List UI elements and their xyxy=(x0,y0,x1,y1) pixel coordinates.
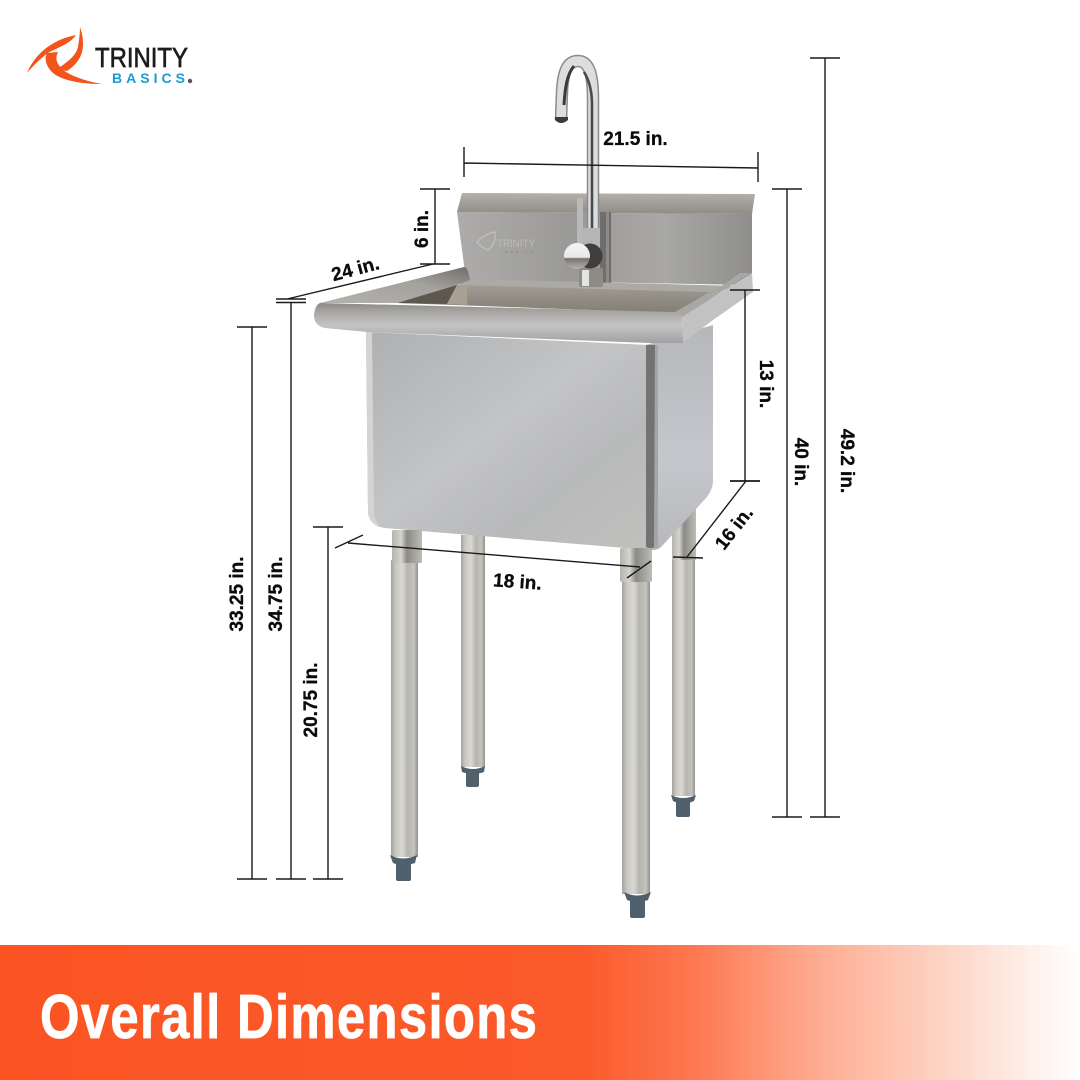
logo: Trinity Basics xyxy=(27,27,192,86)
dimension lines xyxy=(227,58,857,879)
dimension: 24 in.: 24 in. xyxy=(329,253,382,286)
basin xyxy=(397,285,710,313)
back legs xyxy=(461,505,696,817)
sink illustration xyxy=(314,61,755,918)
dimension: 18 in. xyxy=(335,535,651,595)
backsplash embossed logo: TRINITY xyxy=(497,238,536,250)
front legs xyxy=(390,530,652,918)
dimension: 40 in.: 40 in. xyxy=(790,438,811,486)
dimension: 34.75 in. xyxy=(266,303,306,879)
dimension: 49.2 in.: 49.2 in. xyxy=(836,429,857,493)
title: Overall Dimensions xyxy=(40,983,537,1052)
dimension: 6 in.: 6 in. xyxy=(412,210,433,248)
spout reflection xyxy=(564,66,574,105)
sink body xyxy=(366,325,713,550)
gooseneck outline xyxy=(561,61,593,250)
right deck face xyxy=(682,273,753,343)
dimension: 13 in.: 13 in. xyxy=(755,360,776,408)
dimension: 33.25 in. xyxy=(227,327,267,879)
dimension: 6 in. xyxy=(412,189,450,264)
dimension: 20.75 in. xyxy=(301,527,343,879)
valve ball xyxy=(564,243,590,269)
basin shadow xyxy=(397,285,457,304)
dimension: 13 in. xyxy=(730,290,776,481)
gooseneck chrome xyxy=(561,61,593,250)
left deck band xyxy=(320,267,470,303)
gooseneck column reflection xyxy=(584,72,592,250)
dimension: 34.75 in.: 34.75 in. xyxy=(266,556,287,632)
dimension: 24 in. xyxy=(276,253,433,302)
dimension: 40 in. xyxy=(772,189,811,817)
collar xyxy=(582,228,600,252)
backsplash embossed logo: BASICS xyxy=(505,249,533,254)
registered mark xyxy=(188,79,192,83)
lever xyxy=(577,198,583,248)
valve base xyxy=(579,268,603,287)
icon: orange swirl xyxy=(27,27,102,84)
back deck strip xyxy=(457,279,740,293)
dimension: 49.2 in. xyxy=(810,58,857,817)
footer band xyxy=(0,945,1080,1080)
dimension: 20.75 in.: 20.75 in. xyxy=(301,662,322,738)
dimension: 16 in.: 16 in. xyxy=(711,503,758,554)
sink deck xyxy=(320,267,753,343)
right deck surface xyxy=(675,273,750,318)
spout tip xyxy=(555,117,568,123)
logo sub-wordmark: BASICS xyxy=(112,70,185,86)
valve body xyxy=(578,244,602,268)
dimension: 21.5 in.: 21.5 in. xyxy=(603,129,668,150)
backsplash xyxy=(457,193,755,285)
backsplash embossed logo xyxy=(477,232,536,254)
logo wordmark: TRINITY xyxy=(95,42,188,73)
dimension: 33.25 in.: 33.25 in. xyxy=(227,556,248,632)
basin corner xyxy=(447,285,467,305)
dimension: 21.5 in. xyxy=(464,129,758,182)
dimension: 18 in.: 18 in. xyxy=(492,570,542,595)
faucet xyxy=(555,61,603,287)
dimension: 16 in. xyxy=(673,481,760,558)
front rim xyxy=(314,303,683,343)
